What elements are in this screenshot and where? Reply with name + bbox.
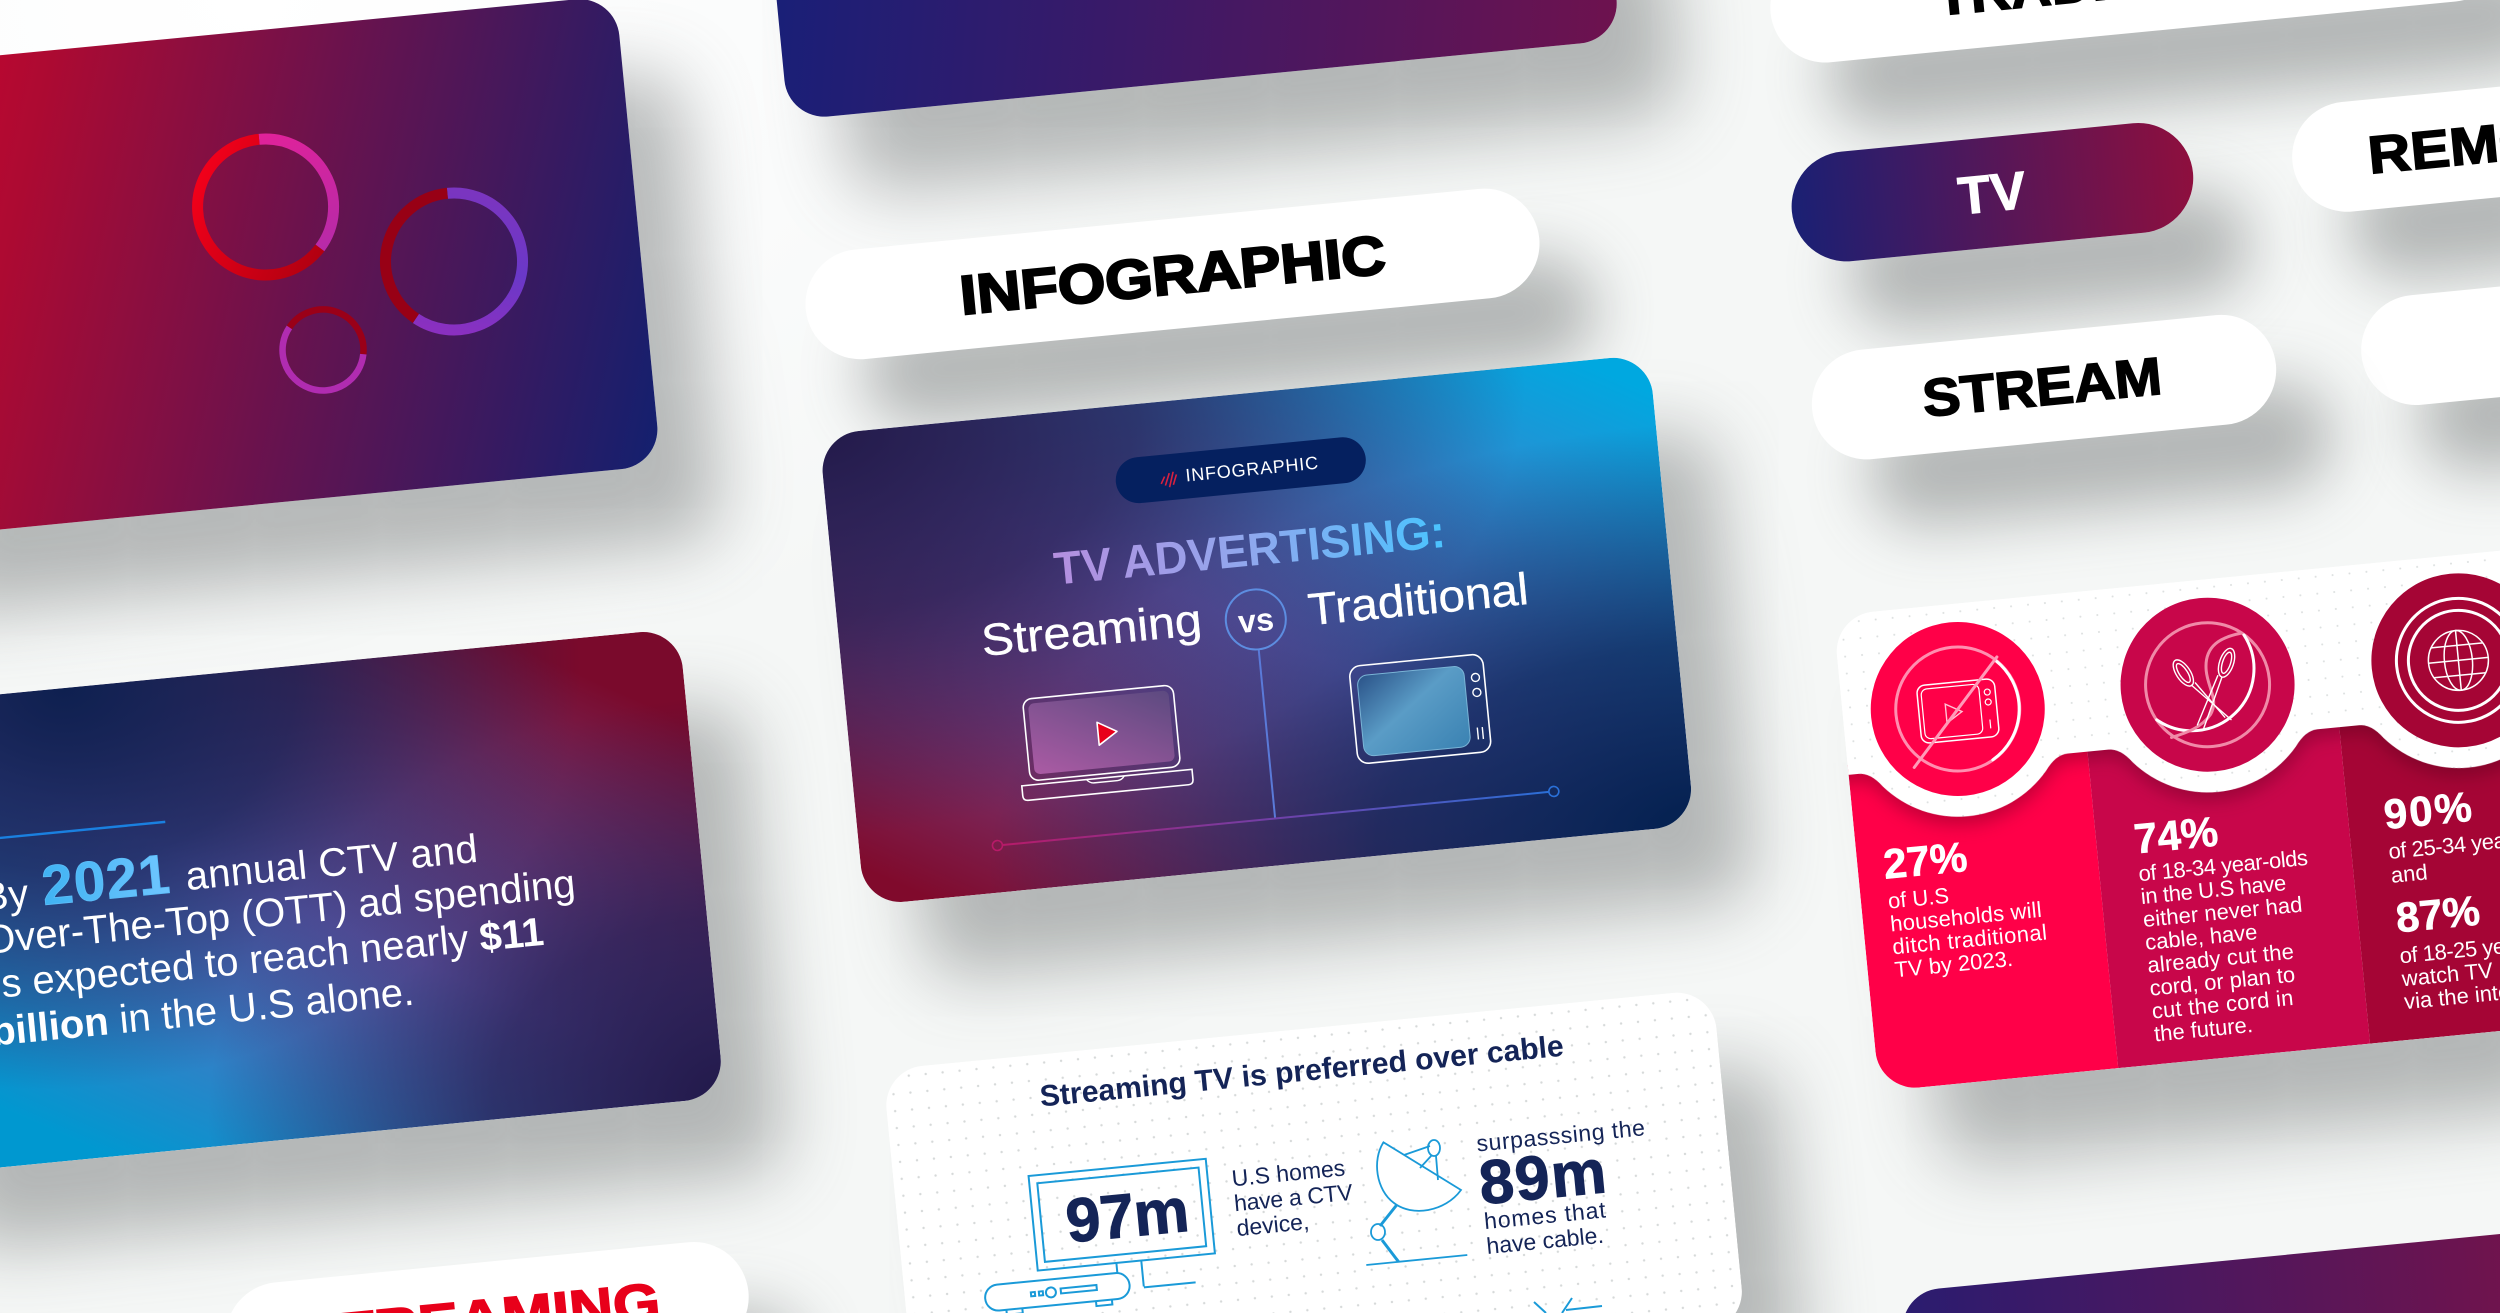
- stat text block: 2021: [39, 842, 172, 917]
- icon: scissors cutting the cord: [2113, 590, 2303, 780]
- panel: top-center gradient card: [743, 0, 1620, 120]
- label: Streaming: Streaming: [979, 594, 1204, 666]
- panel: bottom-right gradient card: [1899, 1212, 2500, 1313]
- stat text block: billion in the U.S alone.: [0, 970, 416, 1055]
- pill: STREAM: [1807, 310, 2281, 464]
- title: TV ADVERTISING:: [1051, 505, 1448, 595]
- pill: INFOGRAPHIC: [800, 184, 1545, 364]
- ring: large right: [386, 193, 523, 330]
- pill: TRADITIONAL: [1765, 0, 2500, 68]
- panel: top-left ring chart card: [0, 0, 661, 546]
- text: 74% description: either never had: [2142, 892, 2303, 932]
- text: U.S homes: [1230, 1154, 1357, 1241]
- accent line: [0, 822, 165, 840]
- stat text block: is expected to reach nearly $11: [0, 910, 546, 1007]
- stat: 89m: 89m: [1476, 1137, 1609, 1218]
- text: 27% description: of U.S: [1887, 883, 1950, 914]
- icon: globe: [2363, 565, 2500, 755]
- panel: title card TV advertising: [819, 354, 1695, 906]
- badge: infographic: [1114, 435, 1368, 505]
- panel: CTV and OTT ad spending card: [0, 628, 724, 1178]
- text: 74% description: cord, or plan to: [2148, 962, 2296, 1001]
- text: surpassing: surpasssing the: [1475, 1114, 1646, 1156]
- text: 27% description: ditch traditional: [1891, 919, 2048, 959]
- pill: INFOGRAPHIC: INFOGRAPHIC: [957, 223, 1388, 326]
- vs badge: vs: [1236, 601, 1275, 640]
- stat: 74%: 74%: [2132, 808, 2220, 862]
- ring: large left: [198, 139, 334, 275]
- label: Traditional: Traditional: [1306, 563, 1531, 635]
- stat text block: [0, 803, 586, 1055]
- icon: satellite dish: [1366, 1139, 1468, 1266]
- icon: no TV: [1863, 614, 2053, 804]
- text: 87% description: [2397, 927, 2500, 1014]
- text: 27% description: [1887, 874, 2050, 982]
- text: 74% description: of 18-34 year-olds: [2137, 845, 2309, 886]
- panel: household statistics: [1833, 535, 2500, 1091]
- text: 74% description: in the U.S have: [2140, 870, 2287, 909]
- icon: monitor with set-top box: [974, 1159, 1219, 1313]
- text: U.S homes: have a CTV: [1233, 1179, 1355, 1216]
- text: 90% description: [2387, 823, 2500, 888]
- pill: STREAM: STREAM: [1920, 347, 2164, 429]
- wavy white band with notches: [1811, 513, 2500, 829]
- text: homes that have cable: [1483, 1196, 1610, 1259]
- text: 27% description: TV by 2023.: [1893, 946, 2014, 982]
- text: U.S homes: U.S homes: [1230, 1154, 1346, 1191]
- stat: 27%: 27%: [1881, 833, 1969, 888]
- vs badge: [1223, 587, 1289, 652]
- pill: REMOTE: [2287, 59, 2500, 217]
- text: 74% description: the future.: [2153, 1012, 2254, 1046]
- panel: streaming preferred over cable: [883, 989, 1746, 1313]
- stat: 74%: [2132, 799, 2325, 1047]
- stat text block: Over-The-Top (OTT) ad spending: [0, 862, 577, 963]
- stat: 27%: [1881, 826, 2050, 982]
- chart: three progress rings: [192, 134, 528, 394]
- icon: laptop with play button: [1013, 684, 1193, 801]
- stat: 90% and 87%: [2382, 775, 2500, 1014]
- pill: blank partly visible: [2356, 252, 2500, 410]
- text: homes that have cable: homes that: [1483, 1196, 1607, 1234]
- column 2: [2087, 717, 2370, 1068]
- stat: 90% and 87%: 90%: [2382, 783, 2474, 838]
- text: 74% description: already cut the: [2146, 939, 2295, 978]
- heading: Streaming TV is preferred over cable: [1038, 1030, 1565, 1113]
- text: 74% description: cable, have: [2144, 919, 2258, 955]
- text: 27% description: households will: [1889, 897, 2043, 936]
- stat: 97m: 97m: [1063, 1176, 1192, 1256]
- icon: television: [1349, 654, 1492, 764]
- text: 74% description: [2137, 845, 2325, 1046]
- badge label: INFOGRAPHIC: [1185, 453, 1319, 486]
- text: 87% description: watch TV: [2400, 957, 2494, 991]
- text: homes that have cable: have cable.: [1485, 1222, 1605, 1259]
- text: 90% description: and: [2390, 859, 2429, 888]
- pill: STREAMING: [221, 1237, 754, 1313]
- column 1: [1848, 742, 2118, 1091]
- stat text block: annual CTV and: [184, 827, 479, 899]
- column 3: [2338, 684, 2500, 1044]
- icon: antenna partly visible: [1533, 1298, 1602, 1313]
- text: U.S homes: device,: [1235, 1208, 1310, 1241]
- connector lines: [976, 622, 1559, 851]
- text: 74% description: cut the cord in: [2151, 985, 2294, 1024]
- stat: 87%: 87%: [2394, 887, 2482, 941]
- pill: TV: TV: [1956, 161, 2029, 226]
- icon: logo slashes: [1160, 471, 1178, 488]
- ring: small: [283, 309, 364, 390]
- pill: TV: [1787, 118, 2198, 266]
